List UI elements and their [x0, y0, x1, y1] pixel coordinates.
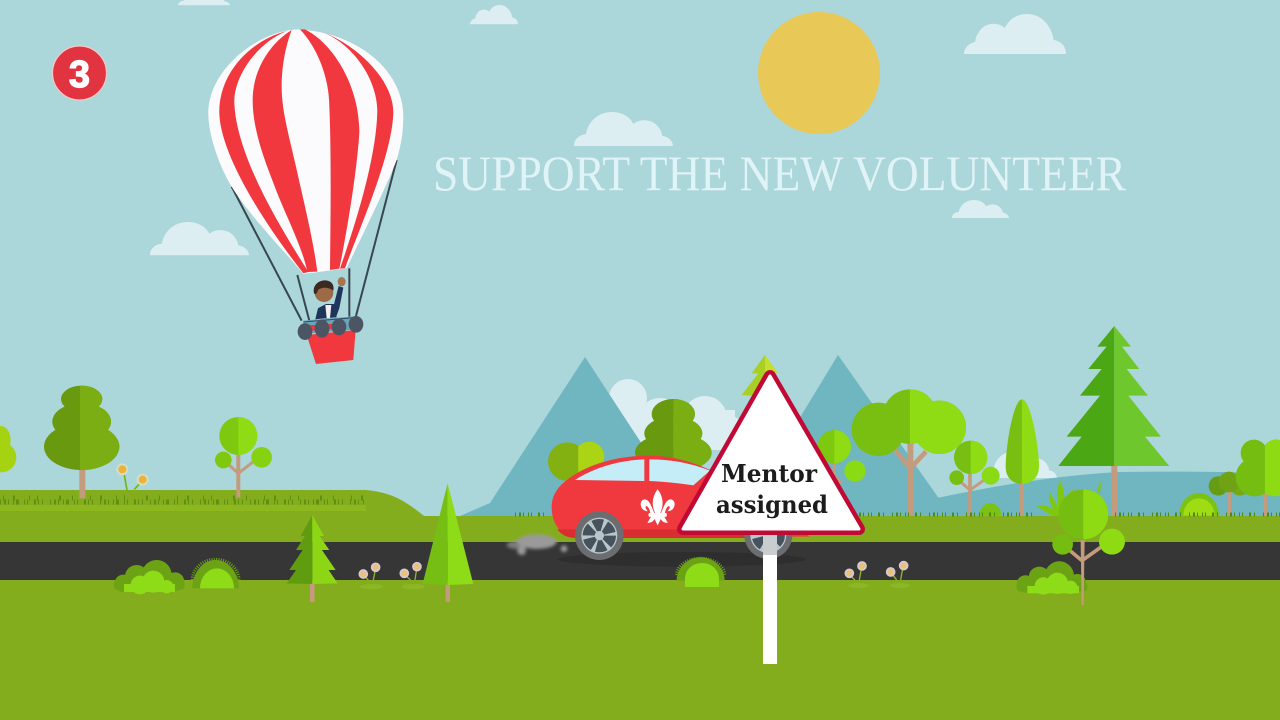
person	[314, 277, 346, 319]
ball tree behind sign	[818, 430, 866, 483]
right scenery trees	[852, 326, 1280, 518]
car shadow	[558, 552, 806, 567]
big broadleaf tree	[852, 389, 966, 515]
tree at right edge	[1236, 440, 1280, 515]
foreground plants middle and right	[677, 557, 725, 587]
fern	[1037, 480, 1102, 518]
step badge	[52, 46, 106, 100]
foreground plants left	[114, 483, 473, 602]
leafy bush	[114, 560, 185, 594]
ground	[0, 516, 1280, 720]
hill grass	[0, 498, 366, 511]
front window	[649, 459, 710, 485]
hot air balloon	[208, 29, 403, 364]
sign triangle face	[683, 376, 859, 529]
mentor sign: assigned	[716, 490, 828, 519]
pale flowers	[359, 563, 425, 589]
envelope	[208, 29, 403, 274]
roadside grass	[515, 512, 1280, 516]
stripe inner left	[253, 30, 317, 272]
cloud behind mountains	[609, 379, 744, 450]
sign post	[763, 533, 777, 664]
distant scenery	[460, 355, 1280, 516]
mountain right	[740, 355, 940, 516]
stripe outer right	[317, 30, 393, 269]
stripe inner right	[300, 29, 359, 270]
mentor sign	[683, 376, 859, 664]
car with smoke	[507, 456, 810, 567]
sign text: Mentor	[721, 459, 817, 488]
cone tree	[423, 483, 473, 602]
orange flowers	[116, 463, 149, 490]
mountain left	[460, 357, 672, 516]
sun	[758, 12, 880, 134]
small ball tree	[949, 441, 1000, 515]
rear window	[575, 459, 644, 481]
cypress tree	[1006, 399, 1039, 515]
pale flowers	[845, 562, 910, 588]
front wheel	[744, 511, 792, 559]
basket rim	[303, 316, 358, 334]
mid ground trees	[548, 355, 866, 490]
tree at left edge	[0, 426, 16, 472]
back bush	[979, 503, 1001, 516]
ropes	[232, 160, 397, 321]
basket	[307, 330, 356, 364]
step badge: 3	[69, 54, 90, 96]
sign triangle border	[683, 376, 859, 529]
sandbags	[298, 316, 363, 340]
car body	[552, 456, 810, 537]
leafy bush	[1017, 561, 1087, 595]
left hill trees	[0, 386, 272, 498]
left hill	[0, 490, 424, 516]
clouds	[150, 0, 1066, 255]
road	[0, 542, 1280, 580]
exhaust smoke	[507, 534, 567, 555]
ball tree	[215, 417, 272, 497]
sill	[557, 529, 780, 538]
rear wheel	[575, 511, 624, 560]
far hill	[937, 472, 1280, 516]
stripe outer left	[219, 31, 308, 273]
foreground plants right	[845, 489, 1125, 605]
small dark tree	[1209, 472, 1250, 516]
title: SUPPORT THE NEW VOLUNTEER	[433, 145, 1127, 201]
fleur-de-lis emblem	[641, 490, 674, 524]
cloud behind far hill	[985, 452, 1057, 478]
spiky bush	[192, 559, 239, 588]
small pine	[287, 515, 338, 602]
yellow pine behind sign	[742, 355, 788, 397]
spiky bush	[1179, 493, 1219, 516]
big fir tree	[1058, 326, 1169, 517]
spiky road bush	[677, 557, 725, 587]
tree behind car left	[548, 442, 604, 481]
layered tree	[44, 386, 119, 498]
foreground ball tree	[1052, 489, 1125, 605]
dark tree behind car	[635, 399, 712, 472]
